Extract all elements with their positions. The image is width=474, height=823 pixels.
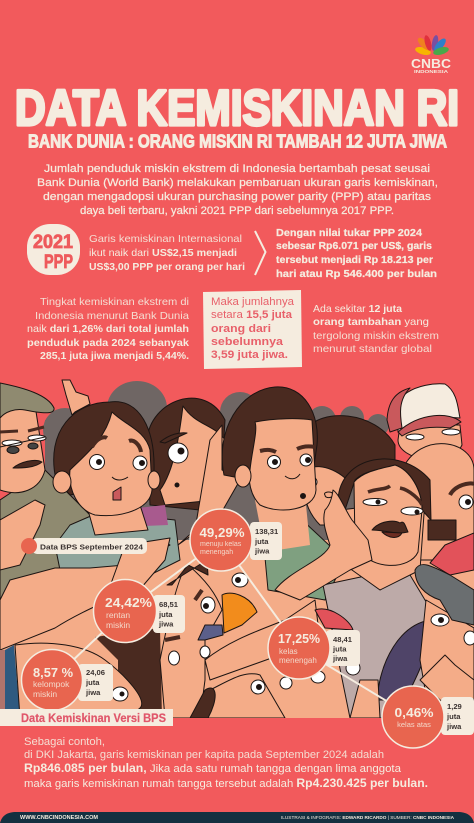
person: first boy [53, 402, 160, 535]
text: extreme poverty rate: Tingkat kemiskinan ekstrem di [40, 297, 189, 308]
person: teal shirt body [56, 516, 180, 574]
banner: Data Kemiskinan Versi BPS: Data Kemiskinan Versi BPS [21, 711, 166, 725]
text: 12 juta tambahan [313, 304, 439, 355]
person: raised finger [62, 380, 90, 415]
stat: 24,42% rentan miskin: 24,42% [105, 595, 152, 610]
stat: 24,42% rentan miskin: juta [158, 610, 173, 619]
intro paragraph: dengan mengadopsi ukuran purchasing power parity (PPP) atau paritas [43, 191, 431, 203]
text: PPP 2024 conversion: tersebut menjadi Rp 18.213 per [276, 255, 433, 266]
person: red cap [315, 609, 353, 630]
person: second boy behind [147, 398, 225, 510]
person: mustache man [338, 459, 431, 590]
text: extreme poverty rate: 285,1 juta jiwa menjadi 5,44%. [40, 351, 189, 362]
person: arm across centre [205, 600, 320, 680]
legend pill: Data BPS September 2024 [21, 538, 147, 554]
stat: 17,25% kelas menengah [268, 617, 360, 679]
stat: 8,57% kelompok miskin: 8,57 % [33, 665, 73, 680]
stat: 49,29% menuju kelas menengah: menuju kelas [200, 541, 242, 548]
stat: 0,46% kelas atas [382, 686, 474, 748]
text: PPP 2024 conversion: sebesar Rp6.071 per US$, garis [276, 241, 432, 252]
person: third boy [222, 387, 317, 510]
stat: 0,46% kelas atas: 1,29 [447, 702, 462, 711]
text: 12 juta tambahan: orang tambahan yang [313, 317, 429, 328]
stat: 49,29% menuju kelas menengah: 138,31 [255, 527, 279, 536]
text: PPP 2024 conversion: hari atau Rp 546.400 per bulan [276, 269, 437, 280]
person: neck of boy three [255, 500, 310, 550]
person: left man with cap and glasses [0, 383, 95, 600]
connector lines between percentage circles [52, 540, 413, 717]
crowd background silhouettes [43, 381, 389, 540]
stat: 8,57% kelompok miskin: jiwa [85, 688, 101, 697]
stat: 49,29% menuju kelas menengah: menengah [200, 549, 233, 556]
text: international poverty line [89, 234, 245, 273]
intro paragraph: Jumlah penduduk miskin ekstrem di Indonesia bertambah pesat seusai [44, 163, 430, 175]
person: hand behind ear [178, 425, 240, 545]
stat: 8,57% kelompok miskin [22, 650, 113, 710]
stat: 17,25% kelas menengah: kelas [279, 647, 298, 656]
stat: 8,57% kelompok miskin: juta [85, 678, 100, 687]
person: hand on face [275, 490, 372, 600]
stat: 49,29% menuju kelas menengah: 49,29% [200, 525, 245, 540]
logo: CNBC Indonesia: INDONESIA [414, 69, 449, 74]
person: red garment right [430, 533, 474, 575]
stat: 17,25% kelas menengah: jiwa [332, 654, 348, 663]
footer bar [0, 812, 474, 823]
person: dark hair lower left [95, 629, 162, 709]
person: lower faces [190, 661, 360, 718]
person: bald man right [402, 444, 474, 560]
intro paragraph: Bank Dunia (World Bank) melakukan pembaruan ukuran garis kemiskinan, [37, 177, 438, 189]
stat: 24,42% rentan miskin: rentan [106, 610, 130, 620]
stat: 49,29% menuju kelas menengah: juta [254, 537, 269, 546]
illustration: crowd of people [0, 380, 474, 720]
text: DKI Jakarta example: Rp846.085 per bulan, Jika ada satu rumah tangga dengan lima anggota [24, 761, 402, 775]
stat: 8,57% kelompok miskin: 24,06 [86, 668, 105, 677]
text: extreme poverty rate: penduduk pada 2024 sebanyak [27, 338, 189, 349]
badge: 2021 PPP [27, 224, 80, 275]
intro paragraph: daya beli terbaru, yakni 2021 PPP dari sebelumnya 2017 PPP. [80, 205, 394, 217]
callout: 15,5 juta: orang dari [211, 323, 271, 335]
footer bar: WWW.CNBCINDONESIA.COM [20, 815, 98, 821]
stat: 24,42% rentan miskin: jiwa [158, 620, 174, 628]
stat: 24,42% rentan miskin: 68,51 [159, 600, 179, 609]
stat: 0,46% kelas atas: jiwa [446, 722, 462, 731]
stat: 24,42% rentan miskin [94, 580, 185, 642]
person: hands raised left [0, 500, 170, 650]
text: DKI Jakarta example [24, 736, 428, 790]
skin base of lower crowd [0, 540, 474, 720]
stat: 49,29% menuju kelas menengah: jiwa [254, 546, 270, 556]
person: green shirt body [264, 524, 336, 600]
callout: 15,5 juta [203, 290, 302, 369]
badge: 2021 PPP: 2021 [33, 232, 73, 253]
person: grey cap right lower [414, 564, 474, 688]
person: center faces [160, 560, 257, 718]
stat: 8,57% kelompok miskin: miskin [33, 689, 57, 699]
text: international poverty line: Garis kemiskinan Internasional [89, 234, 242, 245]
text: international poverty line: US$3,00 PPP per orang per hari [89, 262, 245, 273]
stat: 24,42% rentan miskin: miskin [106, 620, 130, 630]
text: extreme poverty rate: Indonesia menurut Bank Dunia [35, 311, 189, 322]
footer bar: ILUSTRASI & INFOGRAFIS: EDWARD RICARDO | SUMBER: CNBC INDONESIA [281, 815, 454, 820]
text: 12 juta tambahan: menurut standar global [313, 344, 432, 355]
text: 12 juta tambahan: Ada sekitar 12 juta [313, 304, 402, 315]
text: PPP 2024 conversion [276, 228, 437, 280]
person: man behind with dark hair [303, 416, 395, 525]
text: DKI Jakarta example: maka garis kemiskinan rumah tangga tersebut adalah Rp4.230.425 per bulan. [24, 776, 428, 790]
arrow: chevron [255, 231, 266, 275]
stat: 17,25% kelas menengah: 48,41 [333, 635, 353, 644]
logo: CNBC Indonesia: CNBC [411, 56, 452, 71]
intro paragraph [37, 163, 438, 217]
callout: 15,5 juta: 3,59 juta jiwa. [211, 349, 288, 361]
callout: 15,5 juta: Maka jumlahnya [211, 296, 294, 308]
text: 12 juta tambahan: tergolong miskin ekstrem [313, 331, 439, 342]
text: extreme poverty rate: naik dari 1,26% dari total jumlah [27, 324, 189, 335]
stat: 49,29% menuju kelas menengah [190, 509, 282, 571]
stat: 8,57% kelompok miskin: kelompok [33, 679, 70, 689]
person: fingers lower right [350, 680, 380, 718]
stat: 17,25% kelas menengah: 17,25% [278, 631, 320, 646]
stat: 0,46% kelas atas: 0,46% [394, 705, 434, 720]
text: international poverty line: ikut naik dari US$2,15 menjadi [89, 248, 237, 259]
callout: 15,5 juta: setara 15,5 juta [211, 309, 293, 321]
badge: 2021 PPP: PPP [44, 252, 73, 273]
person: lilac shirt [323, 575, 437, 718]
callout: 15,5 juta: sebelumnya [211, 336, 284, 348]
logo: CNBC Indonesia [411, 34, 452, 74]
text: extreme poverty rate [27, 297, 189, 362]
text: PPP 2024 conversion: Dengan nilai tukar PPP 2024 [276, 228, 422, 239]
stat: 17,25% kelas menengah: menengah [279, 656, 317, 665]
person: cap man right [387, 384, 462, 460]
stat: 17,25% kelas menengah: juta [332, 644, 347, 654]
stat: 0,46% kelas atas: juta [446, 712, 461, 721]
legend pill: Data BPS September 2024: Data BPS September 2024 [40, 542, 144, 552]
text: DKI Jakarta example: Sebagai contoh, [24, 736, 105, 748]
stat: 0,46% kelas atas: kelas atas [397, 720, 431, 729]
text: DKI Jakarta example: di DKI Jakarta, garis kemiskinan per kapita pada September 2024 adalah [24, 749, 384, 761]
